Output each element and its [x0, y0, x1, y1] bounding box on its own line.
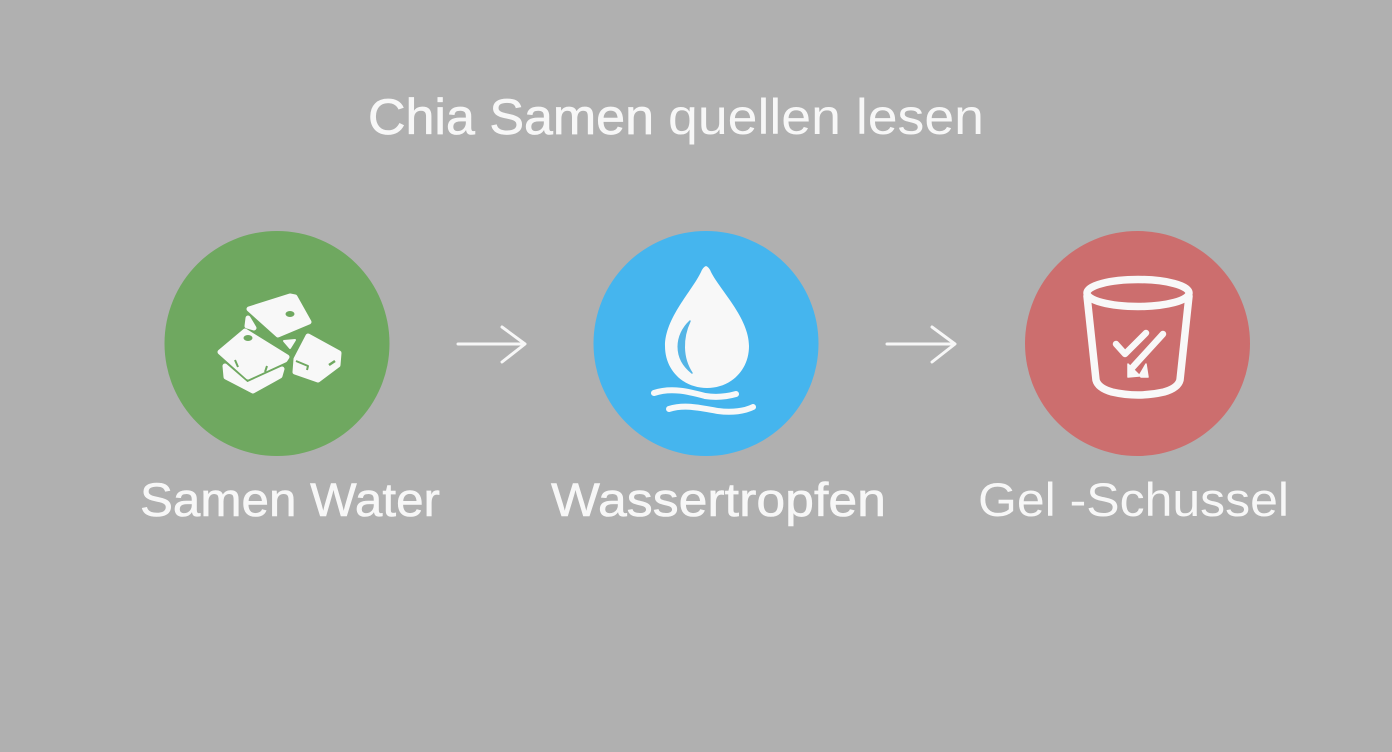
title: Chia Samen	[368, 89, 654, 145]
blue circle	[594, 231, 818, 456]
label: Gel-Schussel: Gel -Schussel	[978, 473, 1289, 526]
step 1: seeds	[140, 231, 440, 526]
arrow 2	[887, 327, 955, 362]
icon: gel cup	[1087, 280, 1189, 395]
title: quellen lesen	[668, 89, 984, 145]
step 3: gel bowl	[978, 231, 1289, 526]
title	[368, 89, 984, 145]
label: Wassertropfen: Wassertropfen	[551, 473, 886, 526]
step 2: water drop	[551, 231, 886, 526]
red circle	[1025, 231, 1250, 456]
icon: water drop	[654, 266, 753, 412]
arrow 1	[458, 327, 525, 362]
label: Samen Water: Samen Water	[140, 473, 440, 526]
icon: seeds	[220, 296, 339, 391]
green circle	[164, 231, 390, 456]
